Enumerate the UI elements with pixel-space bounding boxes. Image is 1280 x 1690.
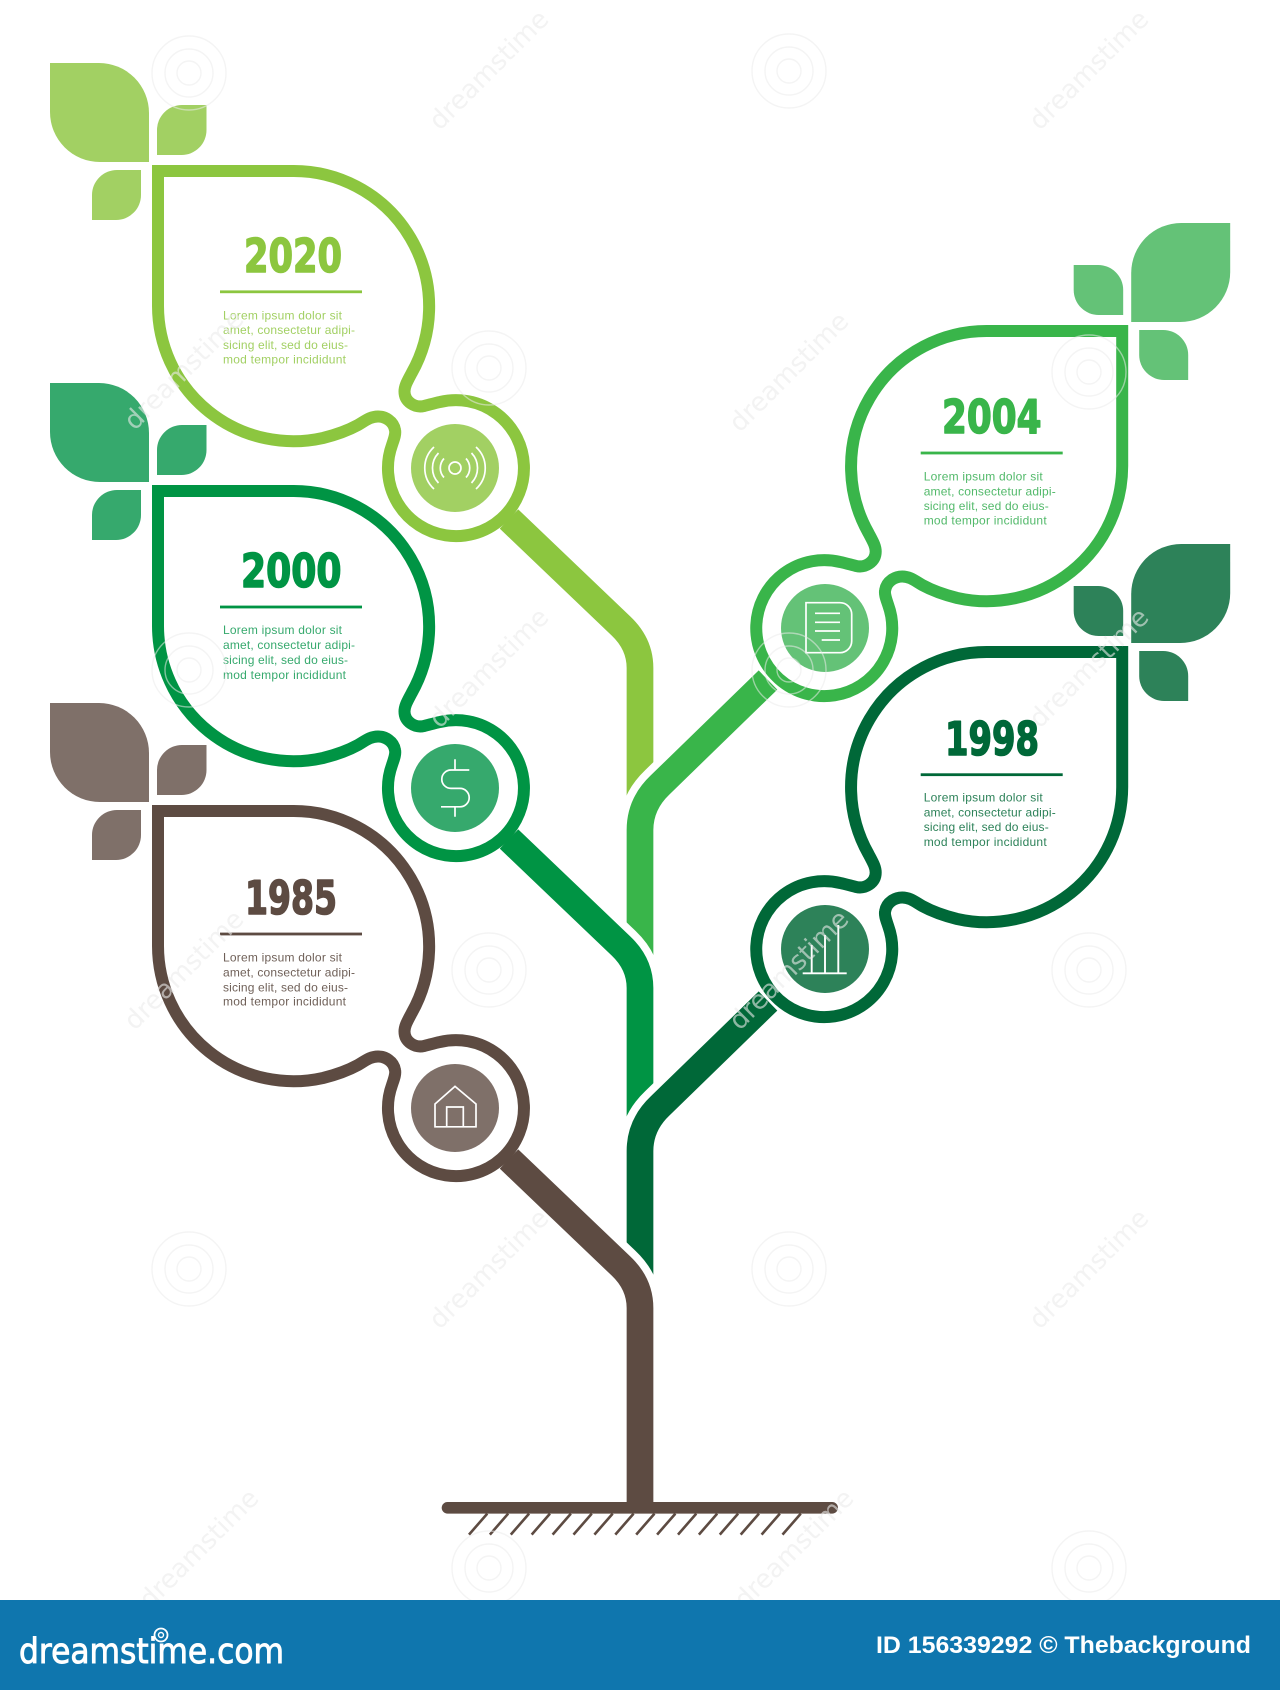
- text: 2000: Lorem ipsum dolor sit: [223, 623, 343, 637]
- icon: house: [411, 1064, 499, 1152]
- text: 2000: [223, 623, 355, 682]
- text: 2000: mod tempor incididunt: [223, 668, 347, 682]
- text: 2020: [223, 308, 355, 367]
- icon: signal: [411, 424, 499, 512]
- rule: 1985: [220, 933, 362, 935]
- outline: 2004: [756, 331, 1122, 696]
- panel: 2000: [50, 383, 524, 856]
- year: 2000: 2000: [241, 544, 342, 598]
- watermark: dreamstime: [134, 1484, 265, 1615]
- year: 2004: 2004: [942, 390, 1042, 444]
- footer bar: [0, 1600, 1280, 1690]
- text: 1998: mod tempor incididunt: [924, 835, 1047, 849]
- text: 2004: amet, consectetur adipi-: [924, 484, 1056, 498]
- footer credit: ID 156339292 © Thebackground: [876, 1632, 1251, 1659]
- outline: 2000: [158, 491, 524, 856]
- text: 1985: Lorem ipsum dolor sit: [223, 951, 343, 965]
- watermark: dreamstime: [119, 305, 250, 436]
- text: 1985: [223, 951, 355, 1009]
- tree trunk and branches: [509, 519, 768, 1505]
- text: 2004: Lorem ipsum dolor sit: [924, 470, 1043, 484]
- text: 1985: mod tempor incididunt: [223, 995, 347, 1009]
- text: 1985: amet, consectetur adipi-: [223, 966, 355, 980]
- year: 2020: 2020: [244, 229, 342, 283]
- branch: 2020: [509, 519, 640, 830]
- text: 2004: sicing elit, sed do eius-: [924, 499, 1049, 513]
- outline: 2020: [158, 171, 524, 536]
- watermark: dreamstime: [724, 905, 855, 1036]
- text: 2020: mod tempor incididunt: [223, 353, 347, 367]
- text: 2004: mod tempor incididunt: [924, 514, 1047, 528]
- watermark: dreamstime: [424, 603, 555, 734]
- watermark: dreamstime: [724, 307, 855, 438]
- rule: 1998: [921, 773, 1063, 776]
- icon: document: [781, 584, 869, 672]
- watermark: dreamstime: [1024, 603, 1155, 734]
- panel: 1985: [50, 703, 524, 1176]
- outline: 1998: [756, 652, 1122, 1017]
- leaves: 2000: [50, 383, 206, 540]
- branch: 1985 and trunk base: [509, 1159, 640, 1505]
- leaves: 2020: [50, 63, 206, 220]
- ground line: [442, 1502, 838, 1535]
- rule: 2004: [921, 452, 1063, 454]
- watermark: dreamstime: [119, 905, 250, 1036]
- text: 2020: amet, consectetur adipi-: [223, 323, 355, 337]
- text: 2004: [924, 470, 1056, 528]
- panel: 2020: [50, 63, 524, 536]
- text: 1998: sicing elit, sed do eius-: [924, 820, 1049, 834]
- panel: 2004: [756, 223, 1230, 696]
- leaves: 1998: [1074, 544, 1230, 701]
- leaves: 1985: [50, 703, 206, 860]
- year: 1985: 1985: [245, 871, 337, 925]
- icon: bar chart: [781, 905, 869, 993]
- branch: 2000: [509, 839, 640, 1150]
- watermark: dreamstime: [729, 1484, 860, 1615]
- outline: 1985: [158, 811, 524, 1176]
- text: 1998: Lorem ipsum dolor sit: [924, 791, 1043, 805]
- rule: 2000: [220, 606, 362, 608]
- watermark: dreamstime: [424, 1204, 555, 1335]
- year: 1998: 1998: [945, 712, 1039, 766]
- branch: 1998: [640, 1001, 768, 1320]
- leaves: 2004: [1074, 223, 1230, 380]
- text: 2000: amet, consectetur adipi-: [223, 638, 355, 652]
- watermark: [119, 5, 1155, 1615]
- text: 2020: sicing elit, sed do eius-: [223, 338, 348, 352]
- icon: dollar: [411, 744, 499, 832]
- text: 2020: Lorem ipsum dolor sit: [223, 308, 343, 322]
- panel: 1998: [756, 544, 1230, 1017]
- text: 1985: sicing elit, sed do eius-: [223, 981, 348, 995]
- text: 2000: sicing elit, sed do eius-: [223, 653, 348, 667]
- rule: 2020: [220, 290, 362, 293]
- watermark: dreamstime: [424, 5, 555, 136]
- watermark: dreamstime: [1024, 5, 1155, 136]
- text: 1998: [924, 791, 1056, 849]
- branch: 2004: [640, 680, 768, 990]
- footer logo: dreamstime.com: [19, 1632, 284, 1672]
- text: 1998: amet, consectetur adipi-: [924, 806, 1056, 820]
- watermark: dreamstime: [1024, 1204, 1155, 1335]
